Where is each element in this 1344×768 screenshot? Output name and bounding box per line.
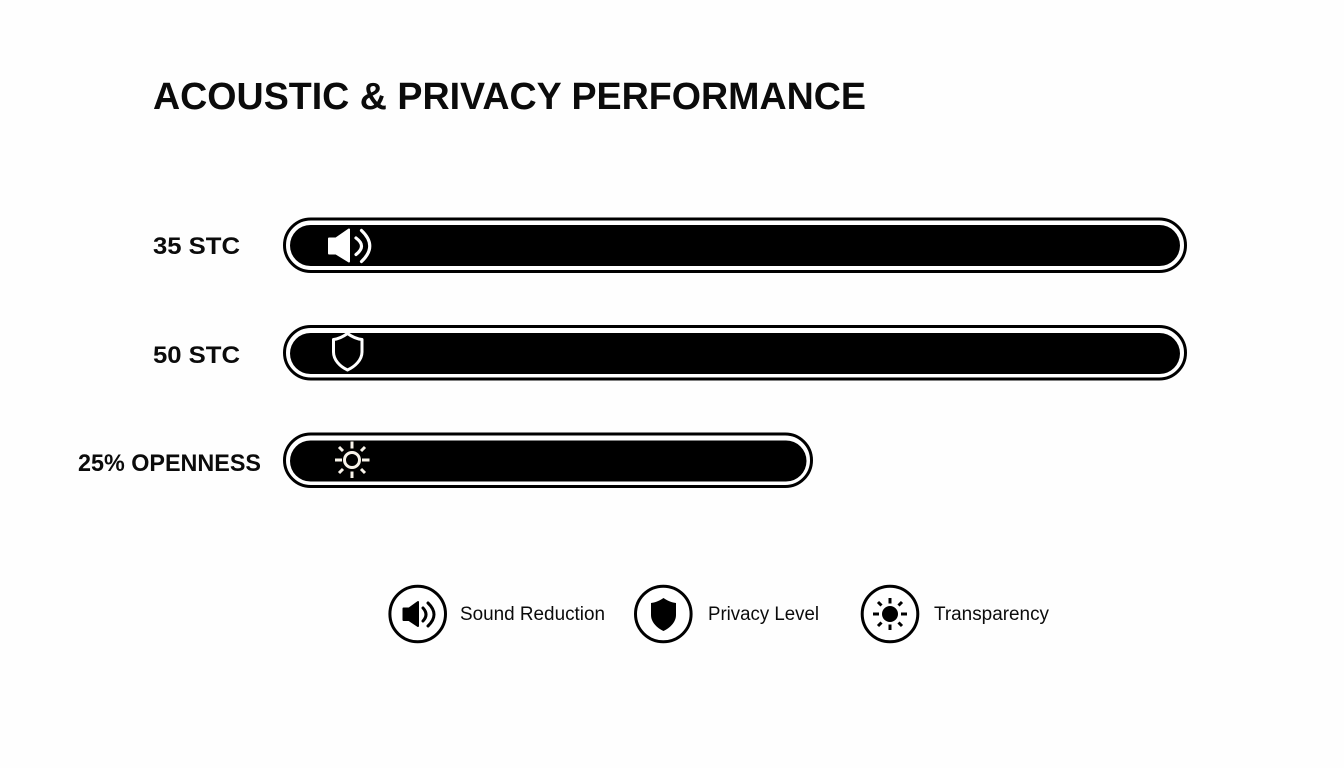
icon: shield outline [334,334,362,370]
bar: 50 STC [284,326,1186,379]
row: 25% openness transparency [78,434,812,486]
label: 50 STC: 50 STC [153,342,240,369]
legend item: privacy level [636,586,819,642]
label: 25% OPENNESS: 25% OPENNESS [78,450,261,477]
legend item: transparency [862,586,1049,642]
icon: speaker [329,230,370,262]
label: 35 STC: 35 STC [153,233,240,260]
legend text: privacy level: Privacy Level [708,604,819,625]
legend item: sound reduction [390,586,605,642]
legend text: transparency: Transparency [934,604,1049,625]
bar: 35 STC [284,219,1186,272]
bar: 25% openness [284,434,812,486]
row: 50 STC privacy level [153,326,1186,379]
legend icon: shield [636,586,691,642]
title: ACOUSTIC & PRIVACY PERFORMANCE [153,76,866,118]
row: 35 STC sound reduction [153,219,1186,272]
legend icon: sun [862,586,918,642]
legend text: sound reduction: Sound Reduction [460,604,605,625]
legend [390,586,1049,642]
icon: sun outline [335,442,370,478]
legend icon: speaker [390,586,446,642]
